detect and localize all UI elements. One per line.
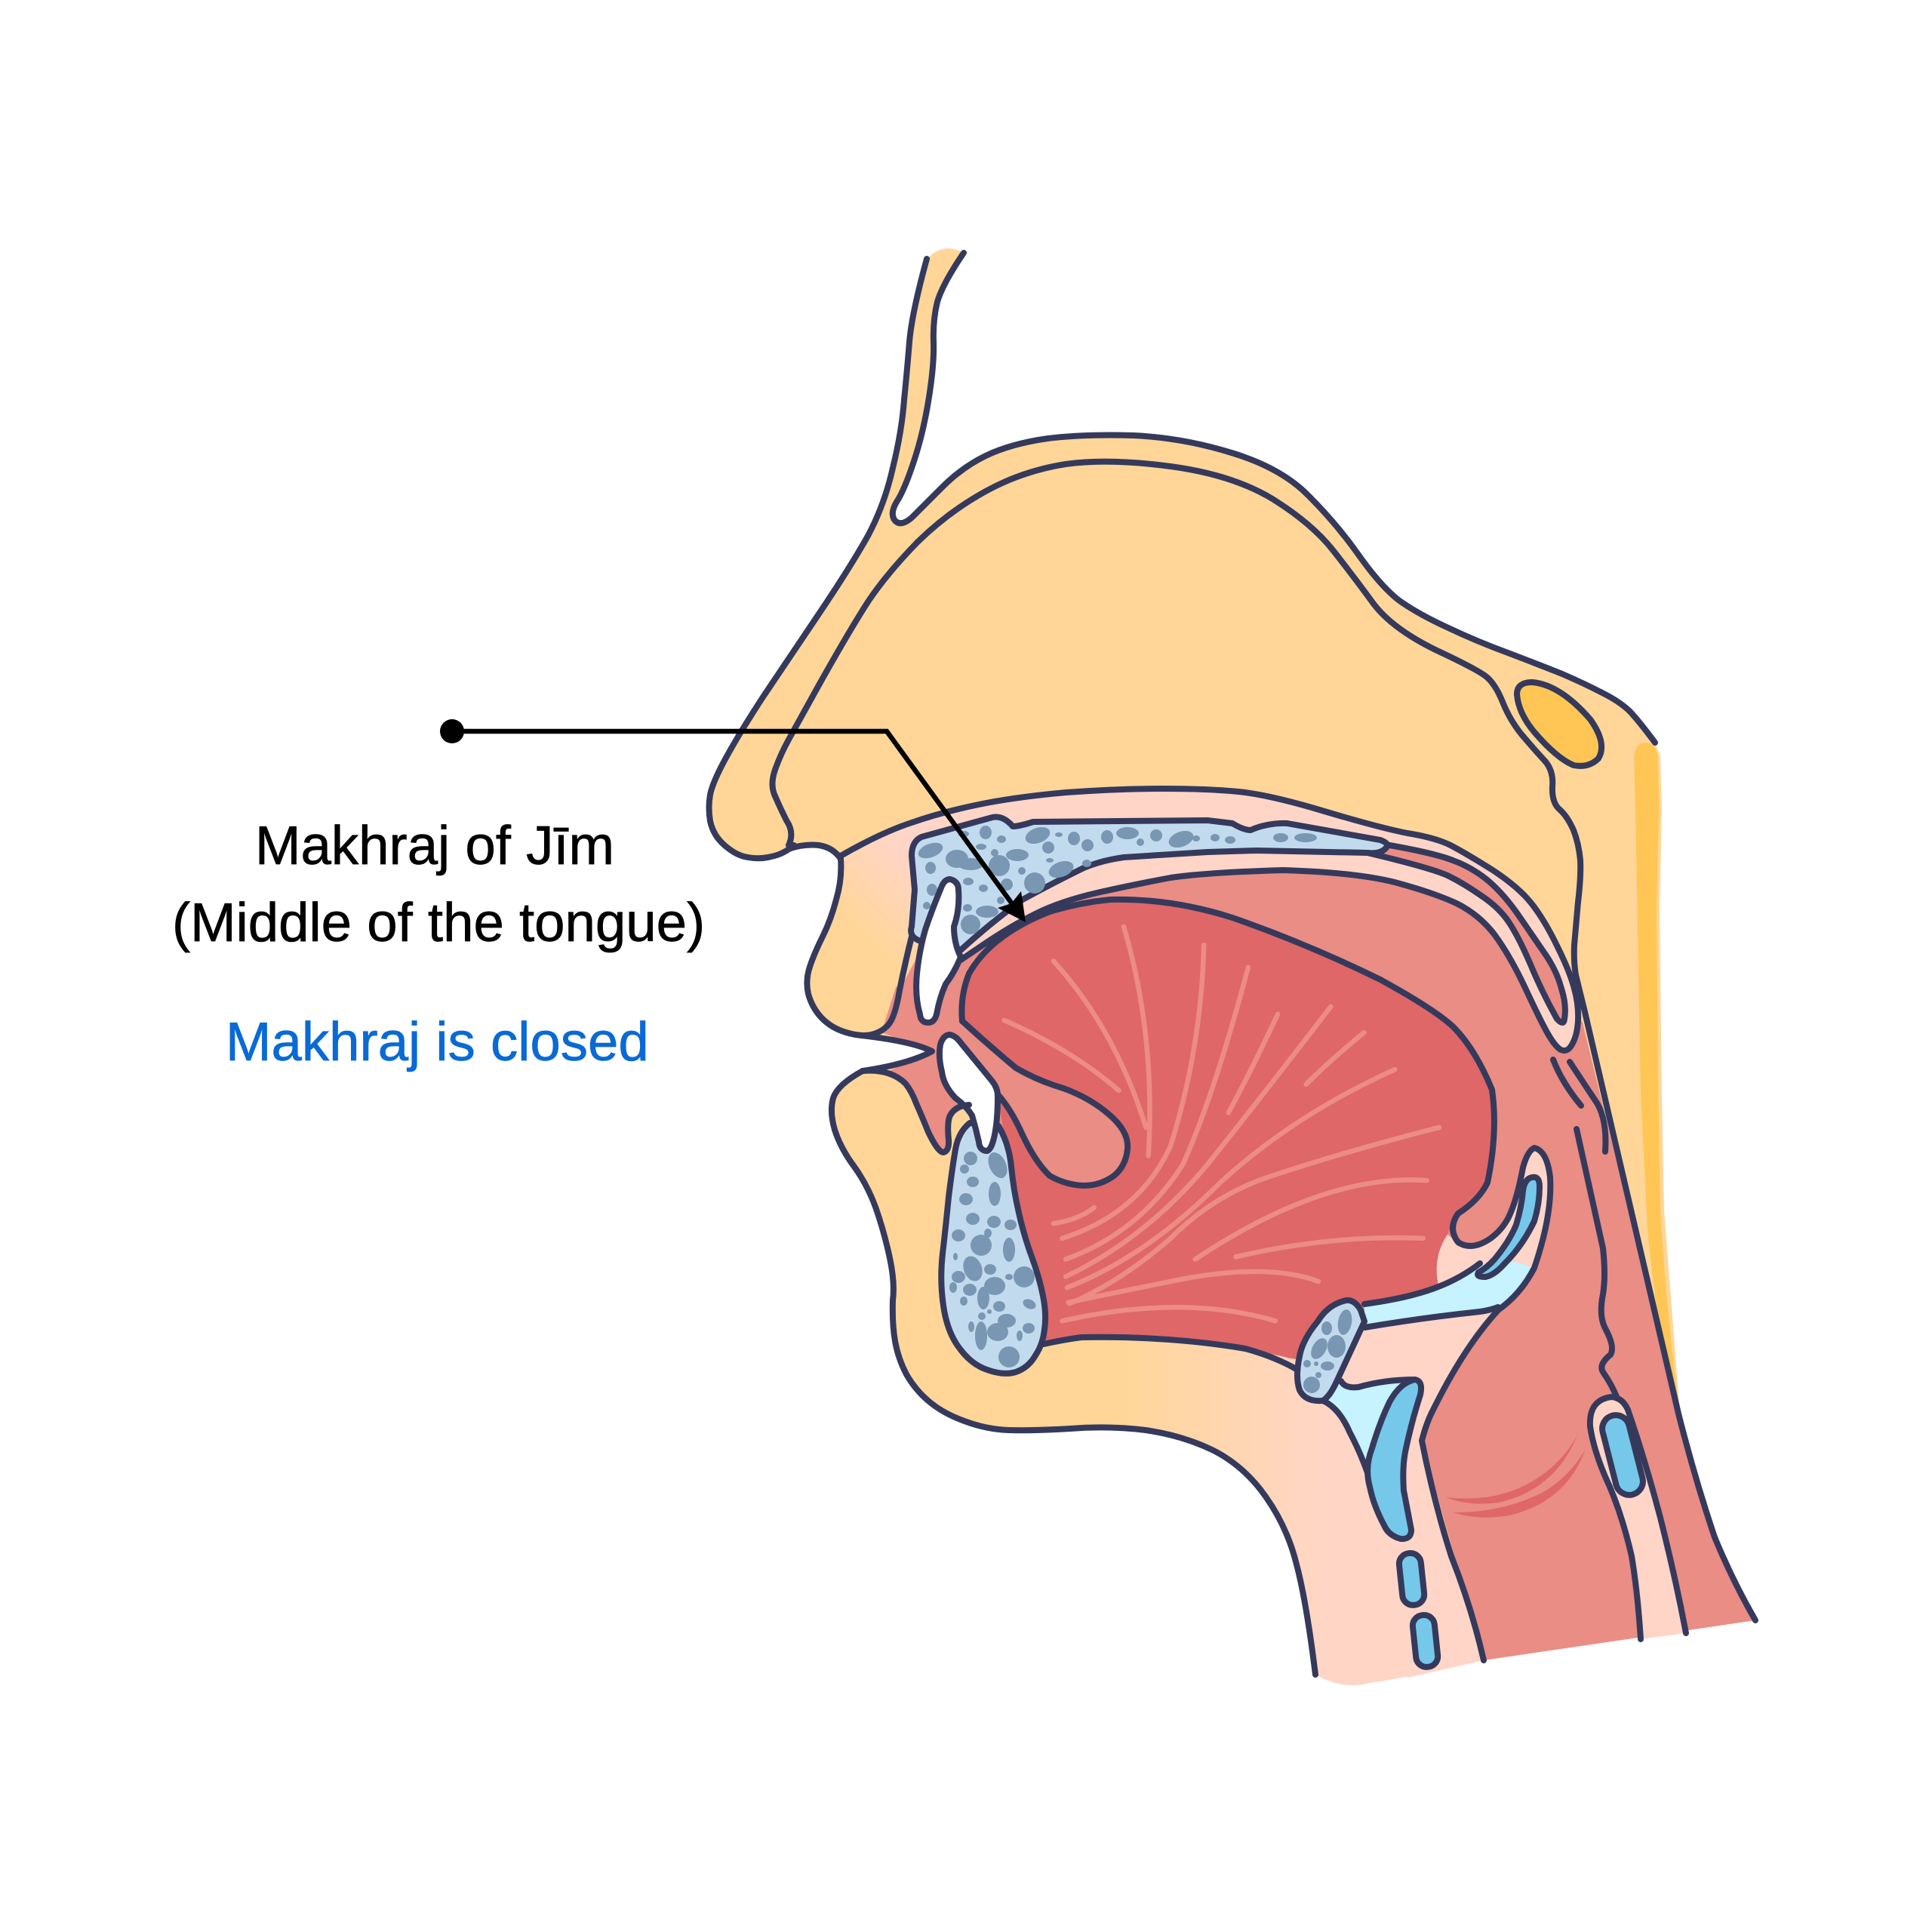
epiglottis — [1341, 1148, 1550, 1678]
short pharynx strokes — [1553, 1060, 1605, 1152]
palate bone specks — [916, 824, 1317, 934]
mouth floor line — [1044, 1337, 1297, 1370]
upper tooth — [916, 879, 961, 1023]
lower lip inner line — [863, 1071, 969, 1152]
upper lip line — [789, 845, 912, 1035]
orange sinus — [1517, 682, 1601, 766]
tongue outline and pharynx front — [961, 900, 1550, 1660]
palate soft tissue — [912, 789, 1578, 1051]
head skin silhouette — [709, 248, 1680, 1675]
thyroid cartilage — [1323, 1377, 1421, 1539]
lower jaw bone — [941, 1123, 1045, 1374]
soft palate muscle core — [1367, 844, 1565, 1023]
soft palate outline — [841, 789, 1578, 1051]
orange fat strip — [1634, 743, 1678, 1410]
mouth opening line — [861, 1035, 932, 1071]
tongue — [962, 900, 1494, 1360]
tracheal rings — [1398, 1552, 1439, 1668]
posterior cartilage capsule — [1590, 1397, 1686, 1639]
throat salmon tissue — [881, 868, 1755, 1660]
pale laryngeal tissue — [1341, 1310, 1498, 1678]
anatomy outlines — [709, 253, 1755, 1675]
hyoid bone — [1297, 1300, 1364, 1401]
lower neck pale skin — [1044, 1310, 1498, 1685]
label: makhraj is closed: Makhraj is closed — [226, 1011, 649, 1072]
chin and neck front line — [832, 1071, 1315, 1675]
jaw bone specks — [949, 1149, 1038, 1367]
upper lip tint — [841, 823, 928, 990]
label: middle of the tongue: (Middle of the tongue) — [172, 892, 705, 953]
outer top line — [893, 253, 1655, 743]
epiglottis blue cartilage — [1478, 1177, 1540, 1277]
palate bone — [911, 817, 1387, 950]
posterior pharynx wavy line — [1577, 1129, 1617, 1398]
inner nasal cavity line and back of neck — [773, 462, 1755, 1620]
lower tooth — [940, 1035, 998, 1151]
tongue muscle fibres — [1004, 927, 1439, 1321]
face profile line — [709, 259, 927, 858]
pointer line with dot and arrow — [440, 719, 1026, 922]
pharynx muscle marks — [1446, 1435, 1585, 1518]
membrane cyan — [1364, 1262, 1534, 1327]
tongue pale root patch — [1437, 1235, 1480, 1286]
membrane lines — [1364, 1263, 1498, 1327]
label: makhraj title: Makhraj of Jīm — [255, 815, 614, 876]
sublingual fold — [962, 1021, 1128, 1186]
